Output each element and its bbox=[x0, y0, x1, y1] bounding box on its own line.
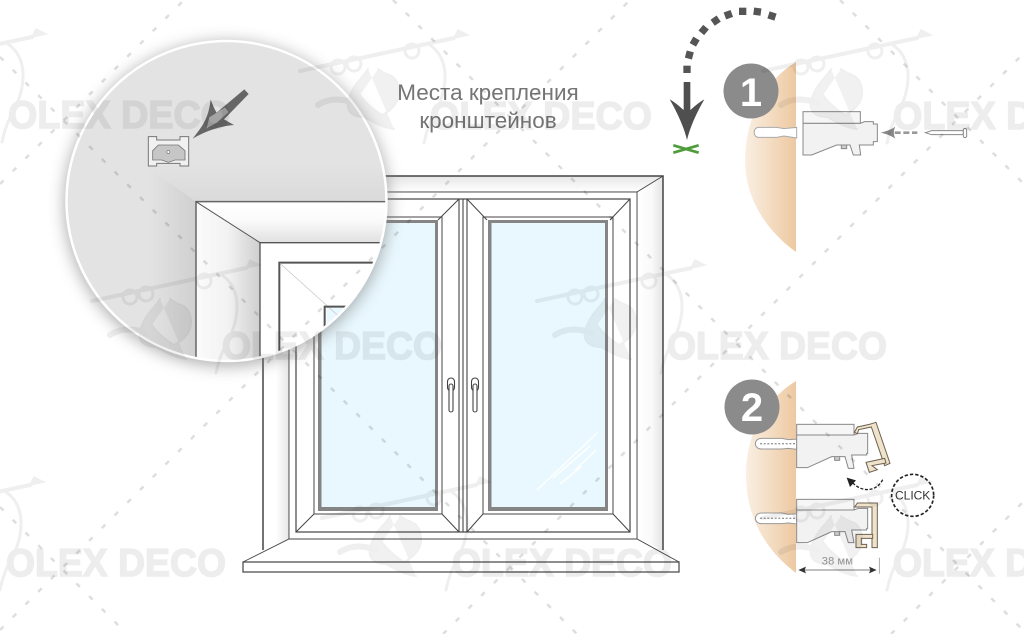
dotted arc bbox=[683, 8, 777, 73]
wall section bbox=[746, 381, 796, 573]
window sill bbox=[243, 539, 679, 572]
badge 1: 1 bbox=[740, 71, 762, 115]
left glass bbox=[322, 223, 435, 507]
badge 2 bbox=[724, 380, 780, 434]
click badge: CLICK bbox=[895, 489, 930, 503]
dimension 38 mm: 38 мм bbox=[822, 556, 853, 568]
dotted curved arrow with marker bbox=[670, 8, 777, 153]
bracket side view bbox=[803, 112, 877, 155]
watermark 4: OLEX DECO bbox=[222, 325, 442, 368]
pointer arrow bbox=[193, 89, 249, 139]
badge 1 bbox=[724, 64, 778, 118]
lower bracket bbox=[797, 499, 868, 543]
down arrow bbox=[670, 82, 704, 140]
green cross mark bbox=[673, 145, 699, 153]
mounting bracket bbox=[148, 137, 189, 166]
wall section bbox=[745, 62, 796, 252]
left sash bbox=[296, 199, 459, 532]
watermark 7: OLEX DECO bbox=[452, 542, 672, 585]
dimension 38 mm bbox=[798, 556, 879, 574]
watermark 6 bbox=[0, 477, 226, 590]
click badge bbox=[892, 474, 934, 516]
lower rail clicked bbox=[855, 503, 877, 548]
glass glare bbox=[537, 433, 597, 490]
heading: Места крепления bbox=[397, 80, 579, 105]
watermark 5 bbox=[537, 260, 887, 373]
curved dashed arrow bbox=[847, 478, 883, 490]
magnified corner bbox=[68, 42, 386, 360]
watermark 6: OLEX DECO bbox=[6, 542, 226, 585]
upper rail tilted bbox=[854, 422, 890, 472]
window handles bbox=[448, 378, 478, 412]
window bbox=[243, 176, 679, 572]
screw bbox=[925, 128, 967, 138]
right sash bbox=[467, 199, 630, 532]
watermark 2 bbox=[300, 30, 652, 143]
watermark 5: OLEX DECO bbox=[667, 325, 887, 368]
step 1 bbox=[724, 62, 967, 252]
window reveal bbox=[263, 176, 663, 550]
badge 2: 2 bbox=[741, 386, 763, 430]
watermark 4 bbox=[92, 260, 442, 373]
window frame bbox=[289, 192, 637, 539]
wall plug bbox=[754, 127, 797, 138]
dashed insertion arrow bbox=[881, 127, 917, 139]
watermark 1: OLEX DECO bbox=[8, 94, 230, 137]
circle rim bbox=[66, 41, 386, 361]
heading: кронштейнов bbox=[419, 108, 557, 133]
upper bracket bbox=[797, 424, 868, 468]
upper plug bbox=[755, 438, 800, 450]
right glass bbox=[492, 223, 605, 507]
watermark 2: OLEX DECO bbox=[430, 95, 652, 138]
watermark 1 bbox=[0, 29, 230, 142]
step 2 bbox=[724, 380, 934, 574]
watermark 3 bbox=[763, 30, 1024, 143]
lower plug bbox=[755, 513, 800, 524]
watermark 8 bbox=[763, 477, 1024, 590]
watermark 7 bbox=[322, 477, 672, 590]
magnified circle bbox=[60, 30, 400, 370]
heading bbox=[397, 80, 579, 133]
